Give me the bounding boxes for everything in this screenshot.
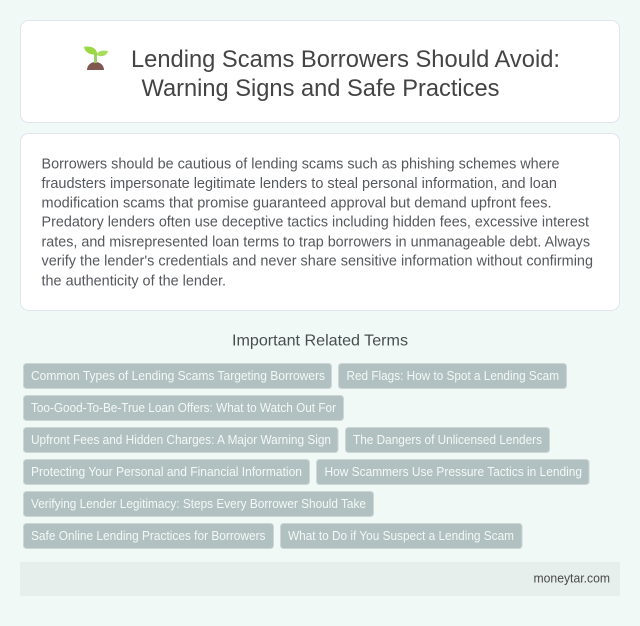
tag (24, 364, 332, 388)
footer source text: moneytar.com (534, 570, 610, 586)
tag (280, 524, 522, 548)
tag: What to Do if You Suspect a Lending Scam (288, 528, 514, 543)
tag (24, 428, 338, 452)
tag: Upfront Fees and Hidden Charges: A Major Warning Sign (31, 432, 331, 447)
title (131, 46, 560, 102)
tag (24, 524, 274, 548)
tag (24, 396, 344, 420)
footer (20, 562, 620, 596)
panel: title header (20, 20, 620, 122)
tag: Too-Good-To-Be-True Loan Offers: What to Watch Out For (31, 400, 337, 415)
tag: Verifying Lender Legitimacy: Steps Every Borrower Should Take (31, 496, 366, 511)
tag: The Dangers of Unlicensed Lenders (353, 432, 542, 447)
panel: related term tags (24, 364, 589, 548)
title: Lending Scams Borrowers Should Avoid: (131, 46, 560, 73)
tag (316, 460, 589, 484)
tag: How Scammers Use Pressure Tactics in Lending (324, 464, 582, 479)
tag (346, 428, 550, 452)
tag: Protecting Your Personal and Financial Information (31, 464, 302, 479)
panel: summary text (20, 134, 620, 310)
title: Warning Signs and Safe Practices (142, 75, 500, 102)
text block: summary paragraph: verify the lender's credentials and never share sensitive information without confirming (42, 253, 593, 270)
text block: summary paragraph: modification scams that promise guaranteed approval but demand upfront fees. (42, 194, 552, 211)
text block: summary paragraph: Borrowers should be cautious of lending scams such as phishing schemes where (42, 156, 560, 172)
tag (338, 364, 566, 388)
tag (24, 492, 374, 516)
text block: summary paragraph: Predatory lenders often use deceptive tactics including hidden fees, excessive interest (42, 214, 590, 231)
text block: summary paragraph: fraudsters impersonate legitimate lenders to steal personal information, and loan (42, 175, 557, 192)
text block: summary paragraph: rates, and misrepresented loan terms to trap borrowers in unmanageable debt. Always (42, 233, 590, 250)
icon: seedling (84, 46, 108, 70)
tag: Common Types of Lending Scams Targeting Borrowers (31, 368, 325, 383)
tag (24, 460, 310, 484)
text block: summary paragraph (42, 156, 593, 289)
tag: Safe Online Lending Practices for Borrowers (31, 528, 266, 543)
tag: Red Flags: How to Spot a Lending Scam (346, 368, 559, 383)
heading: related terms: Important Related Terms (232, 332, 408, 350)
text block: summary paragraph: the authenticity of the lender. (42, 272, 226, 289)
